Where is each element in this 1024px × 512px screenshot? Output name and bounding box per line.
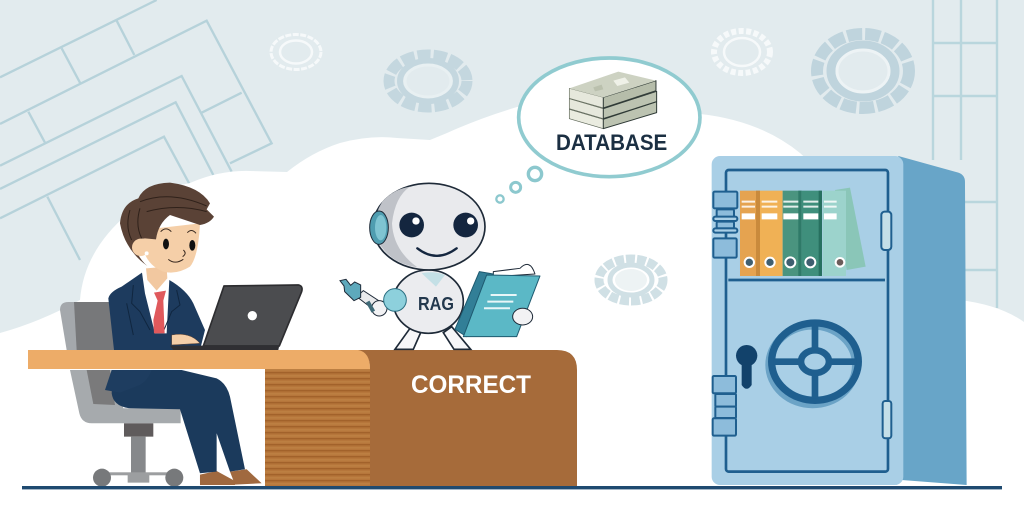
label: CORRECT: CORRECT (411, 371, 531, 399)
door handles right (881, 212, 891, 438)
safe (712, 156, 967, 485)
safe side (897, 156, 967, 485)
safe front (712, 156, 903, 485)
ear piece (370, 211, 388, 244)
person at laptop (60, 183, 302, 487)
laptop (170, 285, 302, 350)
gear: white rings top left (271, 34, 321, 70)
office chair (60, 302, 183, 487)
ear (132, 239, 149, 256)
inner door frame (726, 170, 888, 472)
small thought circles (496, 167, 542, 203)
robot arm (340, 279, 387, 316)
head shading (375, 187, 417, 267)
face (142, 223, 200, 273)
hand (172, 334, 200, 345)
robot (340, 183, 540, 349)
gear: white top right (714, 31, 770, 73)
trousers (112, 370, 245, 473)
shoulder (384, 289, 406, 311)
thought bubble (496, 58, 700, 203)
ground line (22, 486, 1002, 489)
hair strands (128, 197, 207, 240)
blueprint lines: right (933, 0, 997, 308)
gear: large top right (817, 34, 909, 108)
robot body (393, 270, 463, 333)
icon: stack of database books (569, 72, 657, 129)
keyhole (736, 345, 757, 389)
label: RAG: RAG (418, 293, 454, 314)
safe wheel (769, 323, 858, 404)
book (455, 264, 540, 337)
robot legs (395, 327, 471, 349)
jacket torso (108, 273, 205, 350)
lapel lines (127, 285, 180, 335)
red tie (153, 291, 166, 333)
jacket hem (105, 370, 152, 393)
shoes (200, 469, 262, 485)
robot head (373, 183, 485, 270)
desk front panel (358, 350, 577, 486)
binders (740, 188, 866, 276)
eyes and smile (161, 229, 196, 262)
desk wood side (265, 369, 370, 486)
robot smile (417, 248, 457, 256)
gear: blue grey top centre (389, 55, 467, 107)
gear: mid (599, 259, 663, 301)
blueprint lines: left (0, 0, 272, 260)
robot eyes (399, 213, 478, 237)
collar (422, 272, 445, 287)
neck and shirt (142, 267, 169, 332)
hinges left (713, 192, 737, 436)
desk top (28, 350, 370, 369)
label: DATABASE: DATABASE (556, 130, 667, 155)
hair (120, 183, 214, 266)
